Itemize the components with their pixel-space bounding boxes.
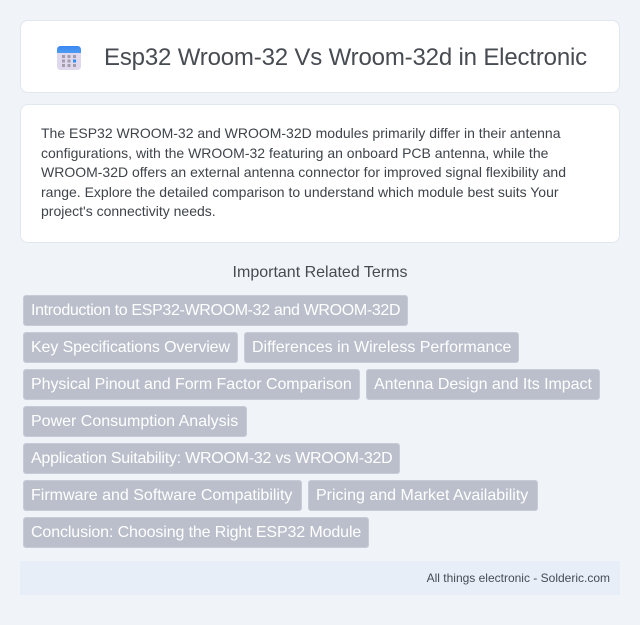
icon: calendar — [57, 46, 81, 70]
chip — [23, 406, 247, 437]
intro text: configurations, with the WROOM-32 featuring an onboard PCB antenna, while the — [41, 144, 548, 160]
chip: Pricing and Market Availability — [316, 487, 528, 504]
chip — [23, 369, 360, 400]
chip: Power Consumption Analysis — [31, 413, 238, 430]
intro text: The ESP32 WROOM-32 and WROOM-32D modules primarily differ in their antenna — [41, 125, 560, 141]
chip — [23, 517, 369, 548]
chip: Introduction to ESP32-WROOM-32 and WROOM-32D — [31, 302, 400, 319]
chip — [23, 443, 400, 474]
title: Esp32 Wroom-32 Vs Wroom-32d in Electronic — [104, 44, 587, 71]
intro card — [20, 104, 620, 243]
footer — [20, 561, 620, 595]
chip — [366, 369, 600, 400]
footer text: All things electronic - Solderic.com — [427, 571, 610, 585]
heading: important related terms: Important Related Terms — [233, 264, 407, 281]
chip: Conclusion: Choosing the Right ESP32 Module — [31, 524, 361, 541]
chip — [308, 480, 538, 511]
chip — [23, 480, 302, 511]
chip: Antenna Design and Its Impact — [374, 376, 592, 393]
intro text: range. Explore the detailed comparison to understand which module best suits Your — [41, 184, 559, 200]
title card — [20, 20, 620, 93]
chip: Differences in Wireless Performance — [252, 339, 511, 356]
intro text: project's connectivity needs. — [41, 203, 216, 219]
chip: Key Specifications Overview — [31, 339, 230, 356]
chip — [23, 295, 408, 326]
chip: Physical Pinout and Form Factor Comparison — [31, 376, 352, 393]
intro text: WROOM-32D offers an external antenna connector for improved signal flexibility and — [41, 164, 566, 180]
chip — [244, 332, 519, 363]
intro text — [41, 125, 566, 219]
chip: Firmware and Software Compatibility — [31, 487, 292, 504]
chip: Application Suitability: WROOM-32 vs WROOM-32D — [31, 450, 392, 467]
chip — [23, 332, 238, 363]
